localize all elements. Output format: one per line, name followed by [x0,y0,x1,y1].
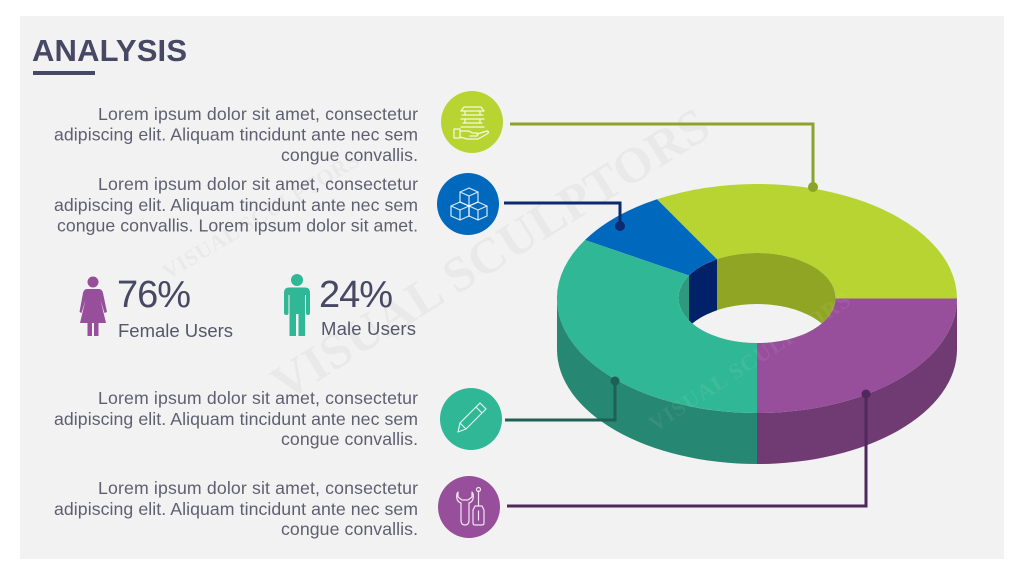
stat: female: 76% [117,274,191,316]
segment: lime [657,184,957,298]
text block 3: congue convallis. [281,429,418,449]
outer wall: teal [557,298,757,464]
watermark: on donut: VISUAL SCULPTORS [644,287,855,436]
segment: blue [585,199,717,276]
stat: male: Male Users [321,318,416,339]
text block 4: Lorem ipsum dolor sit amet, consectetur [98,478,418,498]
icon: purple circle with wrench and screwdriver [438,476,500,538]
stat: female: Female Users [118,320,233,341]
watermark: small left: VISUAL SCULPTORS [158,147,363,284]
icon: blue circle with cubes [437,173,499,235]
text block 3: adipiscing elit. Aliquam tincidunt ante nec sem [54,409,418,429]
connector: purple [507,390,870,506]
icon: teal circle with pencil [440,388,502,450]
text block 2: Lorem ipsum dolor sit amet, consectetur [98,174,418,194]
text block 1: congue convallis. [281,145,418,165]
donut chart [557,184,957,464]
connector: teal [505,376,620,420]
watermark: large: VISUAL SCULPTORS [261,96,719,411]
text block 1: adipiscing elit. Aliquam tincidunt ante nec sem [54,124,418,144]
text block 4 [54,478,418,539]
inner wall and hole [678,253,836,343]
text block 4: congue convallis. [281,519,418,539]
text block 3 [54,388,418,449]
outer wall: purple [757,298,957,464]
text block 1: Lorem ipsum dolor sit amet, consectetur [98,104,418,124]
stat: male [319,274,416,339]
connector: lime [510,124,818,192]
stat: male: 24% [319,274,393,316]
title: ANALYSIS [32,33,187,68]
segment: teal [557,240,757,413]
icon: lime circle with hand and layers [441,91,503,153]
text block 3: Lorem ipsum dolor sit amet, consectetur [98,388,418,408]
stat: female [117,274,233,341]
connector: blue [504,203,625,231]
icon: female user [80,276,107,336]
text block 2: adipiscing elit. Aliquam tincidunt ante nec sem [54,195,418,215]
text block 2: congue convallis. Lorem ipsum dolor sit amet. [57,216,418,236]
text block 4: adipiscing elit. Aliquam tincidunt ante nec sem [54,499,418,519]
text block 2 [54,174,418,236]
icon: male user [284,274,310,336]
title underline [33,71,95,75]
text block 1 [54,104,418,165]
segment: purple [757,298,957,413]
